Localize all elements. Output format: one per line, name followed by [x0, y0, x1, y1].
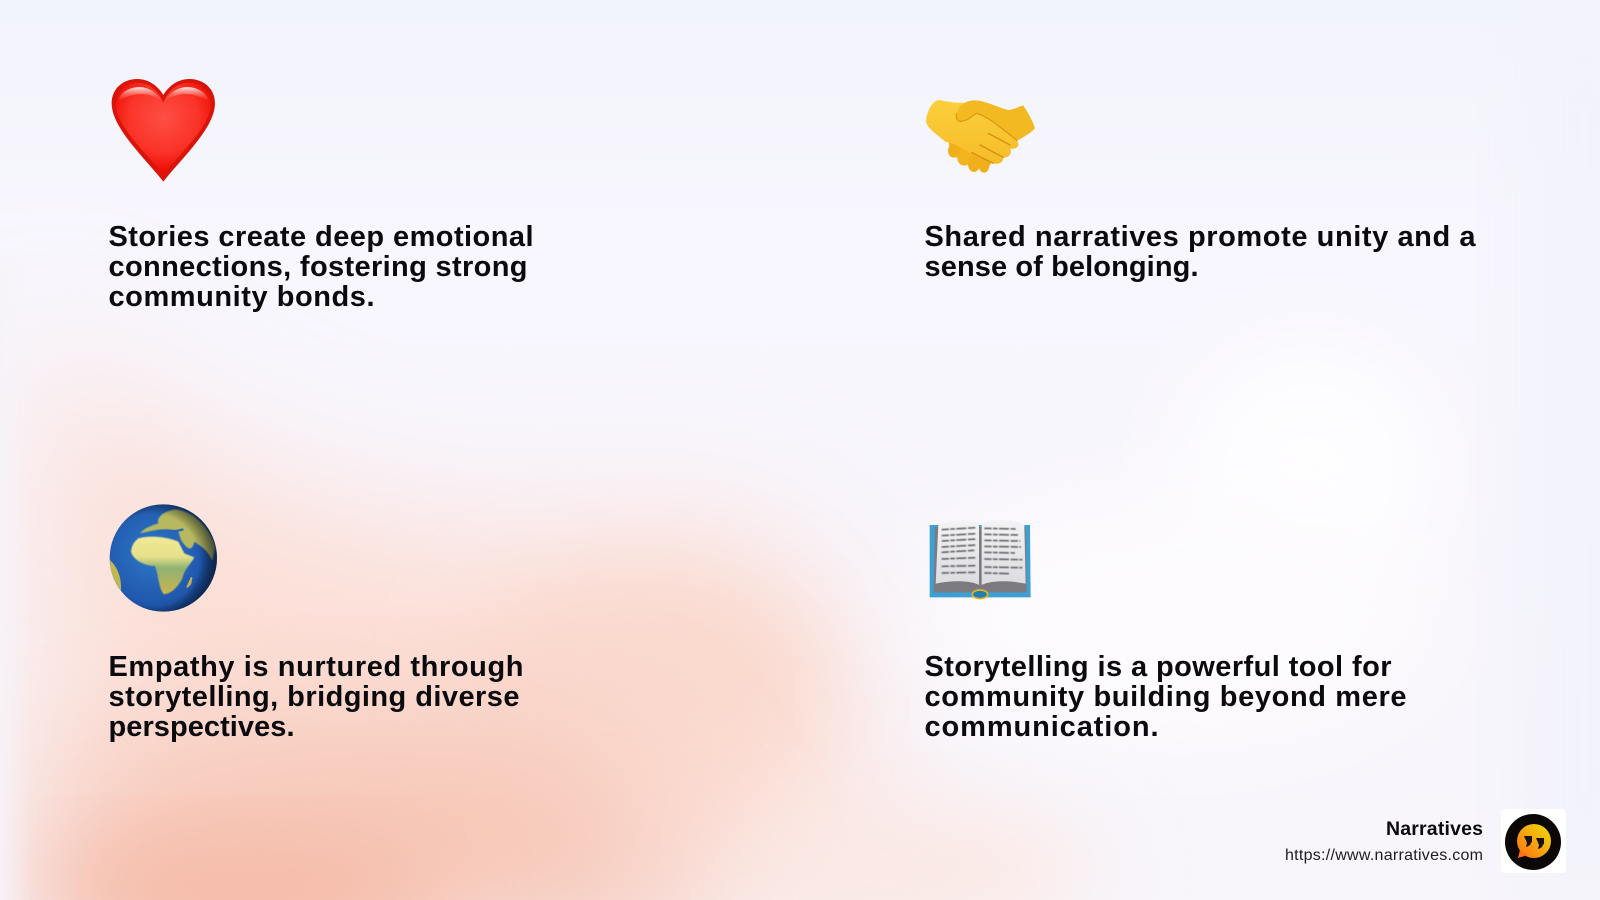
panel: empathy — [108, 504, 532, 743]
icon: handshake — [926, 100, 1035, 173]
icon: red heart — [112, 79, 215, 182]
page lines — [942, 528, 1022, 574]
text: emotional connections: connections, fostering strong — [108, 251, 528, 283]
text: empathy: storytelling, bridging diverse — [108, 681, 520, 713]
text: shared narratives: sense of belonging. — [924, 251, 1198, 283]
ribbon ring — [972, 590, 988, 599]
panel: shared narratives — [924, 100, 1484, 283]
icon: open book — [930, 520, 1031, 599]
text: empathy: perspectives. — [108, 711, 294, 743]
icon: earth globe — [110, 504, 217, 612]
panel: emotional connections — [108, 79, 542, 313]
icon: narratives logo — [1501, 809, 1566, 873]
text: community building: community building beyond mere — [924, 681, 1406, 713]
text: shared narratives: Shared narratives promote unity and a — [924, 221, 1476, 253]
Madagascar — [187, 577, 192, 587]
footer: brand — [1285, 809, 1566, 873]
Africa — [131, 537, 194, 594]
text: emotional connections: community bonds. — [108, 281, 374, 313]
text: community building: communication. — [924, 711, 1158, 743]
text: community building: Storytelling is a powerful tool for — [924, 651, 1392, 683]
brand name: Narratives — [1386, 818, 1483, 840]
brand url: https://www.narratives.com — [1285, 847, 1483, 864]
text: emotional connections: Stories create deep emotional — [108, 221, 534, 253]
Europe and Asia — [140, 509, 216, 561]
panel: community building — [924, 520, 1415, 743]
text: empathy: Empathy is nurtured through — [108, 651, 524, 683]
South America — [110, 560, 121, 591]
